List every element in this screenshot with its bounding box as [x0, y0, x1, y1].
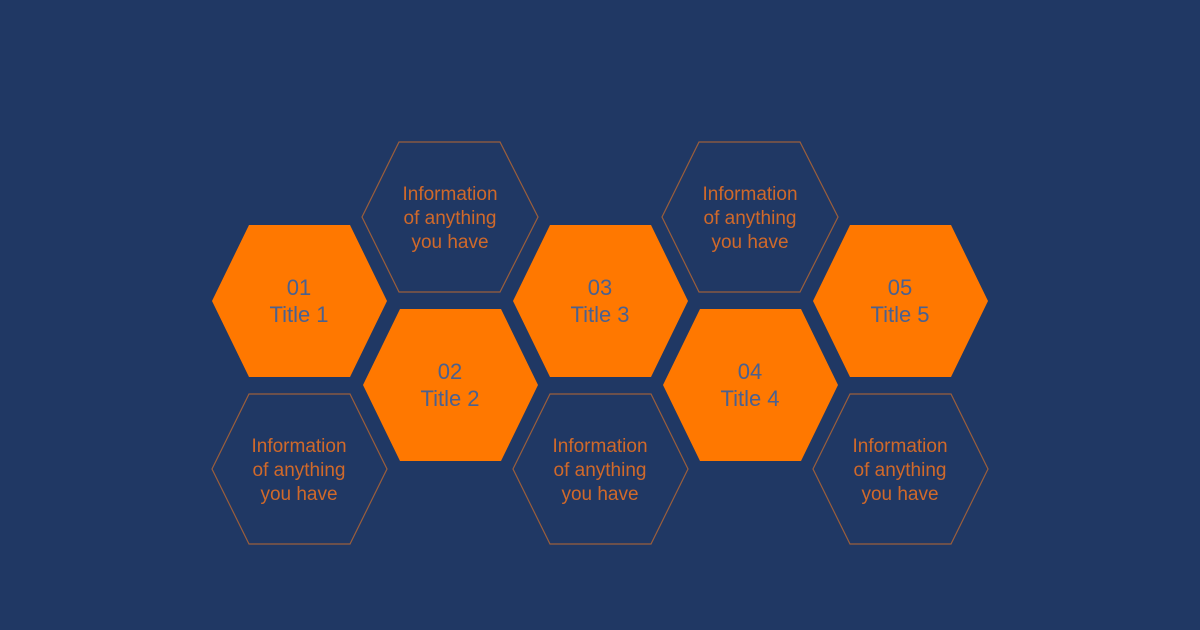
info hex top 1: you have	[411, 232, 489, 253]
info hex top 2	[662, 142, 838, 292]
info hex top 2: you have	[711, 232, 789, 253]
hex: 03 Title 3: Title 3	[570, 302, 630, 327]
info hex bottom 3: of anything	[854, 460, 946, 481]
info hex bottom 3	[813, 394, 988, 544]
info hex bottom 3: Information	[852, 436, 948, 457]
hex: 01 Title 1: 01	[287, 275, 311, 300]
info hex top 2: of anything	[704, 208, 796, 229]
info hex bottom 1	[212, 394, 387, 544]
hex: 01 Title 1	[212, 225, 387, 377]
hex: 04 Title 4: 04	[738, 359, 762, 384]
hex: 04 Title 4	[663, 309, 838, 461]
hex: 02 Title 2: Title 2	[420, 386, 480, 411]
hex: 04 Title 4: Title 4	[720, 386, 780, 411]
info hex bottom 1: Information	[251, 436, 347, 457]
info hex top 1	[362, 142, 538, 292]
hex: 03 Title 3	[513, 225, 688, 377]
hex: 05 Title 5: Title 5	[870, 302, 930, 327]
hex: 05 Title 5	[813, 225, 988, 377]
info hex bottom 2: of anything	[554, 460, 646, 481]
info hex bottom 1: you have	[260, 484, 338, 505]
info hex top 1: Information	[402, 184, 498, 205]
info hex bottom 2: Information	[552, 436, 648, 457]
info hex bottom 2: you have	[561, 484, 639, 505]
hex: 03 Title 3: 03	[588, 275, 612, 300]
hex: 05 Title 5: 05	[888, 275, 912, 300]
hex: 02 Title 2: 02	[438, 359, 462, 384]
info hex bottom 3: you have	[861, 484, 939, 505]
info hex bottom 1: of anything	[253, 460, 345, 481]
hex: 02 Title 2	[363, 309, 538, 461]
info hex top 2: Information	[702, 184, 798, 205]
hex: 01 Title 1: Title 1	[269, 302, 329, 327]
info hex top 1: of anything	[404, 208, 496, 229]
info hex bottom 2	[513, 394, 688, 544]
